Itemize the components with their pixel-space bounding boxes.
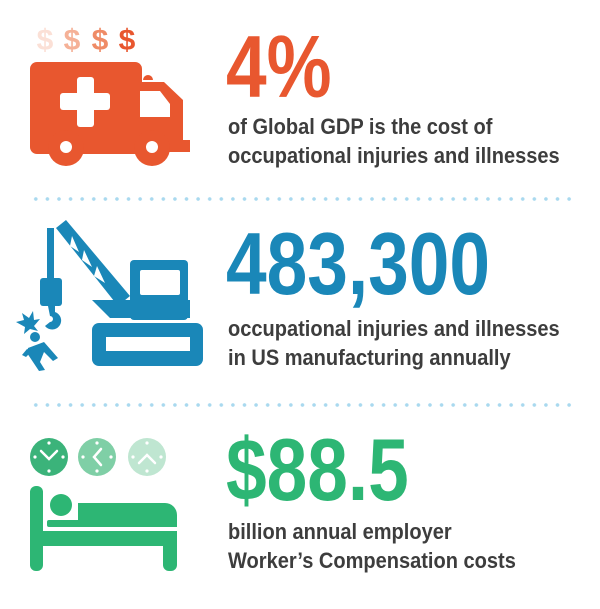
icon: ambulance with dollar signs: $ — [64, 24, 81, 57]
stat: 4%: 4% — [226, 17, 332, 116]
icon: ambulance with dollar signs: $ — [92, 24, 109, 57]
text: GDP cost: of Global GDP is the cost of — [228, 114, 492, 139]
text: GDP cost — [228, 114, 560, 168]
icon: bed with clocks — [30, 438, 177, 571]
text: US manufacturing: in US manufacturing annually — [228, 345, 511, 370]
text: US manufacturing: occupational injuries and illnesses — [228, 316, 560, 341]
text: compensation costs: Worker’s Compensation costs — [228, 548, 516, 573]
stat: 483,300: 483,300 — [226, 214, 490, 313]
icon: ambulance with dollar signs: $ — [119, 24, 136, 57]
icon: crane injury — [16, 220, 203, 371]
icon: ambulance with dollar signs — [30, 24, 190, 166]
text: GDP cost: occupational injuries and illnesses — [228, 143, 560, 168]
text: compensation costs: billion annual employer — [228, 519, 452, 544]
text: US manufacturing — [228, 316, 560, 370]
icon: ambulance with dollar signs: $ — [37, 24, 54, 57]
stat: $88.5: $88.5 — [226, 420, 409, 519]
text: compensation costs — [228, 519, 516, 573]
